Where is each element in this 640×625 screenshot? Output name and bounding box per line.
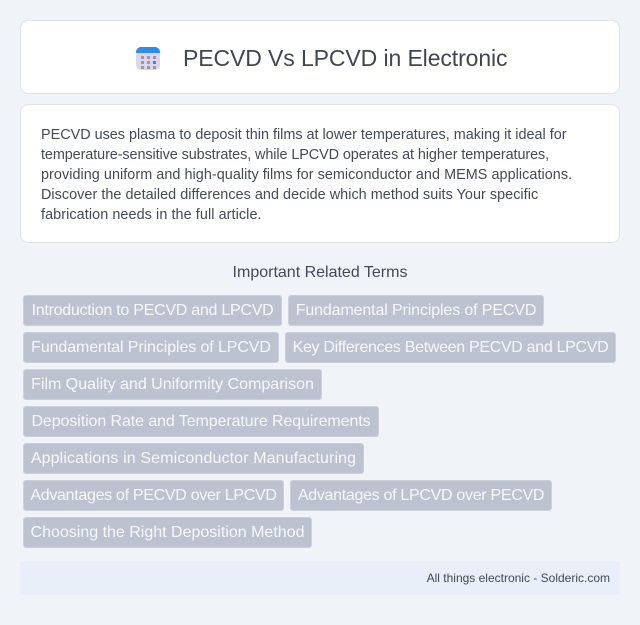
intro panel — [20, 104, 620, 243]
tag — [23, 517, 312, 548]
intro text: providing uniform and high-quality films for semiconductor and MEMS applications. — [41, 167, 572, 183]
tag list — [23, 295, 616, 548]
intro text: Discover the detailed differences and decide which method suits Your specific — [41, 187, 538, 203]
tag: Fundamental Principles of PECVD — [296, 302, 536, 319]
tag — [23, 406, 379, 437]
intro text — [41, 127, 572, 223]
heading: related terms: Important Related Terms — [233, 264, 407, 281]
tag: Film Quality and Uniformity Comparison — [31, 376, 314, 393]
tag: Applications in Semiconductor Manufacturing — [31, 450, 356, 467]
tag: Introduction to PECVD and LPCVD — [32, 302, 273, 319]
title: PECVD Vs LPCVD in Electronic — [183, 45, 507, 71]
tag: Deposition Rate and Temperature Requirements — [31, 413, 371, 430]
tag — [23, 480, 284, 511]
tag — [23, 443, 364, 474]
tag — [23, 332, 279, 363]
tag — [285, 332, 616, 363]
tag: Choosing the Right Deposition Method — [31, 524, 304, 541]
icon: calendar — [136, 47, 160, 70]
tag — [290, 480, 552, 511]
footer: All things electronic - Solderic.com — [427, 571, 610, 585]
tag: Advantages of PECVD over LPCVD — [30, 487, 277, 504]
tag — [23, 369, 322, 400]
tag — [23, 295, 282, 326]
footer — [20, 561, 620, 595]
tag: Advantages of LPCVD over PECVD — [298, 487, 544, 504]
tag — [288, 295, 544, 326]
header panel — [20, 20, 620, 94]
tag: Fundamental Principles of LPCVD — [31, 339, 271, 356]
intro text: fabrication needs in the full article. — [41, 207, 262, 223]
intro text: PECVD uses plasma to deposit thin films at lower temperatures, making it ideal for — [41, 127, 566, 143]
tag: Key Differences Between PECVD and LPCVD — [293, 339, 608, 356]
intro text: temperature-sensitive substrates, while LPCVD operates at higher temperatures, — [41, 147, 549, 163]
